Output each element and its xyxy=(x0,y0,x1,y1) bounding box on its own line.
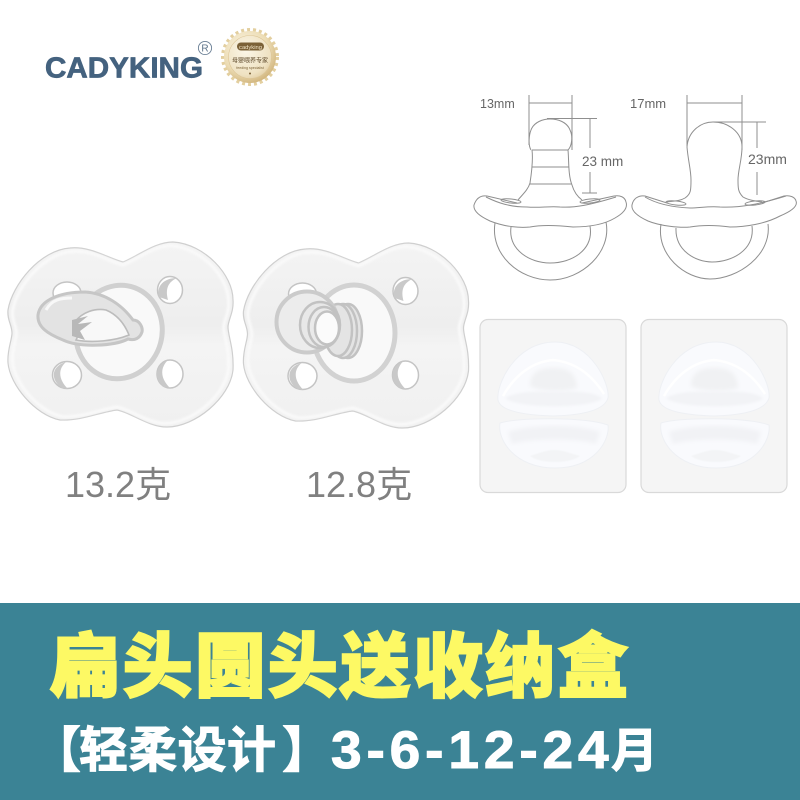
banner headline: 扁头圆头送收纳盒 xyxy=(50,628,628,706)
ring outline xyxy=(494,222,607,280)
shield outline xyxy=(474,196,627,227)
diagram: round nipple dimensions xyxy=(632,95,796,279)
panel: storage case right xyxy=(641,320,787,492)
nipple outline xyxy=(518,119,582,200)
width dimension 17mm xyxy=(687,95,742,150)
banner subtitle xyxy=(32,721,658,780)
shield ring xyxy=(313,285,395,381)
panel: storage case left xyxy=(480,320,626,492)
width dimension 13mm xyxy=(529,95,572,150)
badge subcaption: feeding specialist xyxy=(236,66,264,70)
ring outline xyxy=(660,224,768,279)
closing bracket: 】 xyxy=(282,724,331,778)
label 13mm: 13mm xyxy=(480,97,515,111)
banner background xyxy=(0,603,800,800)
gold medal badge xyxy=(224,30,276,84)
month character: 月 xyxy=(611,724,658,777)
height dimension 23mm xyxy=(547,118,597,193)
label 17mm: 17mm xyxy=(630,96,666,111)
label 23mm round: 23mm xyxy=(748,151,787,167)
diagram: flat nipple dimensions xyxy=(474,95,627,280)
pacifier: flat nipple xyxy=(8,242,233,427)
nipple outline xyxy=(667,122,762,202)
registered mark: R xyxy=(201,44,209,54)
label 23 mm flat: 23 mm xyxy=(582,154,623,169)
registered mark xyxy=(198,41,212,55)
flat nipple xyxy=(38,292,142,345)
brand logo xyxy=(45,41,212,84)
weight label 12.8: 12.8克 xyxy=(306,464,412,505)
weight label 13.2: 13.2克 xyxy=(65,464,171,505)
badge dot xyxy=(249,72,251,74)
opening bracket: 【 xyxy=(32,724,81,778)
shield ring xyxy=(65,275,173,389)
round nipple rings xyxy=(276,292,362,358)
feature tag: 轻柔设计 xyxy=(79,724,276,778)
height dimension 23mm xyxy=(713,122,766,195)
wordmark: CADYKING xyxy=(45,52,203,84)
badge caption: 母婴喂养专家 xyxy=(232,56,268,64)
age range: 3-6-12-24 xyxy=(331,721,609,780)
badge brand pill: cadyking xyxy=(239,45,262,51)
shield outline xyxy=(632,196,796,227)
pacifier: round nipple xyxy=(243,243,469,428)
